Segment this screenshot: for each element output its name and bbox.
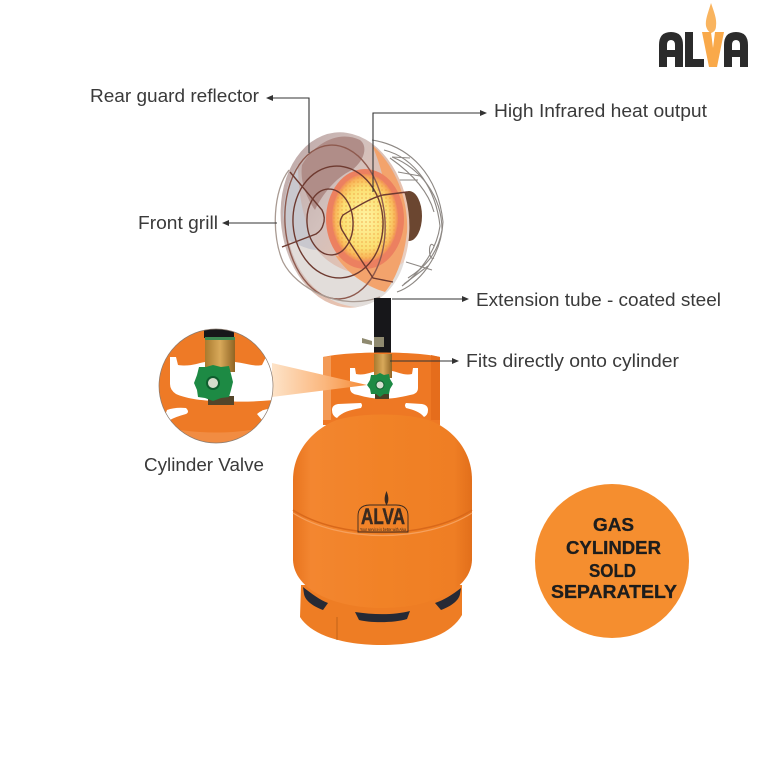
weld seam bbox=[293, 510, 472, 532]
icon: logo flame bbox=[706, 3, 716, 33]
callout: rear guard reflector bbox=[90, 85, 309, 153]
inset lower slots bbox=[164, 408, 188, 420]
inset brass body bbox=[205, 340, 235, 372]
foot slot left bbox=[303, 587, 328, 610]
collar right inner shade bbox=[431, 355, 440, 420]
badge text bbox=[551, 515, 677, 602]
arrowhead bbox=[480, 110, 487, 116]
cylinder logo bbox=[358, 491, 408, 532]
logo letter L bbox=[685, 32, 704, 67]
burner halo bbox=[326, 169, 404, 269]
reflector dish bbox=[271, 125, 419, 315]
badge text: CYLINDER bbox=[566, 538, 661, 558]
reflector lower silver bbox=[287, 221, 404, 307]
cylinder body bbox=[293, 414, 472, 608]
inset lower brass bbox=[208, 396, 234, 405]
reflector upper shadow bbox=[302, 136, 364, 210]
valve wheel green bbox=[367, 373, 393, 397]
label: Fits directly onto cylinder bbox=[466, 350, 679, 371]
arrowhead bbox=[266, 95, 273, 101]
collar lower slot left bbox=[332, 403, 362, 418]
leader line bbox=[390, 360, 458, 362]
inset wheel hub bbox=[207, 377, 219, 389]
front grill wires bbox=[280, 142, 407, 302]
burner mesh bbox=[332, 174, 398, 262]
leader line bbox=[392, 298, 468, 300]
glowing burner bbox=[332, 174, 398, 262]
logo letter A bbox=[659, 32, 683, 67]
rear wire cage bbox=[372, 140, 443, 292]
logo letter V bbox=[702, 32, 724, 67]
inset black tube bbox=[204, 329, 234, 338]
cylinder logo word: ALVA bbox=[361, 504, 405, 529]
wing nut bbox=[362, 337, 384, 347]
badge text: SOLD bbox=[589, 561, 636, 581]
collar left edge bbox=[323, 356, 331, 420]
inset: cylinder valve close-up bbox=[159, 326, 275, 443]
leader line bbox=[223, 222, 277, 224]
cylinder logo tagline: Your service is better with Alva bbox=[360, 527, 406, 532]
logo letter A second bbox=[724, 32, 748, 67]
callout: fits directly onto cylinder bbox=[390, 350, 679, 371]
badge text: GAS bbox=[593, 515, 634, 535]
inset window bbox=[170, 357, 275, 402]
leader line bbox=[373, 113, 486, 192]
arrowhead bbox=[462, 296, 469, 302]
inset green wheel bbox=[194, 365, 233, 401]
collar bbox=[323, 352, 440, 425]
brass regulator bbox=[374, 354, 392, 378]
collar window bbox=[350, 368, 418, 399]
callout: front grill bbox=[138, 212, 277, 233]
label: High Infrared heat output bbox=[494, 100, 707, 121]
zoom beam bbox=[272, 363, 367, 397]
base joint line bbox=[336, 617, 338, 640]
foot slot centre bbox=[355, 611, 410, 622]
label: Extension tube - coated steel bbox=[476, 289, 721, 310]
reflector right orange bbox=[335, 145, 407, 292]
cylinder logo outline bbox=[358, 505, 408, 532]
outer rim wire bbox=[275, 170, 380, 302]
inset lower highlight bbox=[180, 430, 252, 442]
valve hub bbox=[376, 381, 384, 389]
leader line bbox=[267, 98, 309, 153]
arrowhead bbox=[222, 220, 229, 226]
inset green collar bbox=[205, 337, 235, 340]
badge text: SEPARATELY bbox=[551, 582, 677, 602]
badge: gas cylinder sold separately bbox=[535, 484, 689, 638]
valve handwheel bbox=[367, 373, 393, 397]
inset lower slot right bbox=[257, 409, 268, 420]
arrowhead bbox=[452, 358, 459, 364]
badge circle bbox=[535, 484, 689, 638]
inset background bbox=[159, 329, 273, 443]
heater head bbox=[271, 125, 443, 315]
label: cylinder valve: Cylinder Valve bbox=[144, 454, 264, 475]
label: Front grill bbox=[138, 212, 218, 233]
black tube bbox=[374, 298, 391, 356]
logo: ALVA bbox=[659, 3, 748, 67]
valve lower stem bbox=[375, 394, 389, 399]
callout: high infrared heat output bbox=[373, 100, 707, 192]
seam highlight bbox=[293, 513, 472, 536]
reflector left silver bbox=[283, 165, 318, 250]
callout: extension tube bbox=[392, 289, 721, 310]
inset border bbox=[159, 329, 273, 443]
gas cylinder bbox=[293, 352, 472, 645]
label: Rear guard reflector bbox=[90, 85, 259, 106]
collar lower slot right bbox=[405, 403, 428, 417]
extension tube bbox=[362, 298, 391, 356]
base ring bbox=[300, 585, 462, 645]
foot slot right bbox=[435, 588, 461, 610]
cylinder logo flame bbox=[385, 491, 388, 505]
burner back housing bbox=[396, 191, 422, 241]
